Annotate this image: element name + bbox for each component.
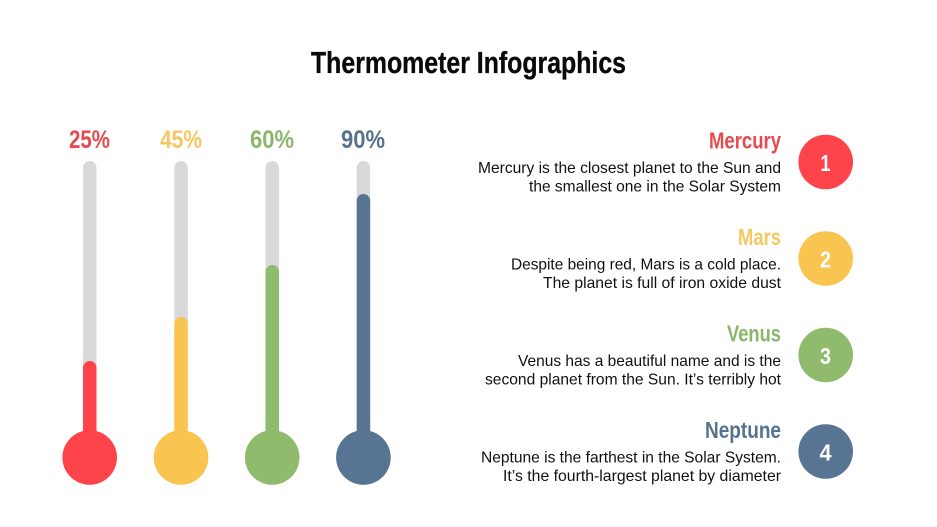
item 1: Mercury: [478, 128, 853, 196]
thermometer: Neptune 90%: [336, 126, 391, 485]
tube fill and bulb: [245, 265, 300, 485]
thermometer chart: [62, 126, 391, 485]
number badge 3: [798, 328, 853, 382]
description: Mars: Despite being red, Mars is a cold place.: [511, 256, 781, 274]
description: Venus: Venus has a beautiful name and is the: [518, 353, 781, 370]
tube track: [357, 161, 370, 451]
percent label: 45%: 45%: [160, 126, 202, 154]
tube fill and bulb: [336, 194, 391, 485]
thermometer: Mars 45%: [154, 126, 208, 485]
description: Neptune: It’s the fourth-largest planet by diameter: [503, 468, 782, 485]
description: Mars: The planet is full of iron oxide dust: [543, 275, 782, 292]
tube fill and bulb: [62, 361, 117, 485]
percent label: 90%: 90%: [341, 126, 385, 154]
number badge 4: 4: [820, 440, 832, 466]
title: Thermometer Infographics: [311, 45, 626, 80]
percent label: 60%: 60%: [250, 126, 294, 154]
description: Venus: second planet from the Sun. It’s terribly hot: [485, 372, 782, 388]
number badge 1: 1: [820, 150, 831, 176]
tube track: [174, 161, 188, 451]
item 2: Mars: [511, 224, 853, 292]
thermometer: Venus 60%: [245, 126, 300, 485]
tube fill and bulb: [154, 317, 208, 485]
percent label: 25%: 25%: [69, 126, 110, 154]
number badge 1: [798, 135, 853, 189]
thermometer: Mercury 25%: [62, 126, 117, 485]
description: Mercury: Mercury is the closest planet to the Sun and: [478, 160, 781, 177]
heading: Venus: Venus: [727, 320, 781, 346]
description: Neptune: Neptune is the farthest in the Solar System.: [481, 450, 781, 466]
heading: Mars: Mars: [738, 224, 781, 250]
number badge 2: 2: [820, 246, 831, 272]
item 4: Neptune: [481, 417, 853, 485]
number badge 2: [798, 231, 853, 286]
description: Mercury: the smallest one in the Solar System: [529, 178, 781, 196]
tube track: [266, 161, 279, 451]
number badge 3: 3: [820, 343, 831, 369]
legend list: [478, 128, 853, 485]
tube track: [83, 161, 96, 451]
number badge 4: [798, 424, 853, 479]
heading: Mercury: Mercury: [709, 128, 781, 154]
item 3: Venus: [485, 320, 853, 388]
heading: Neptune: Neptune: [705, 417, 781, 443]
